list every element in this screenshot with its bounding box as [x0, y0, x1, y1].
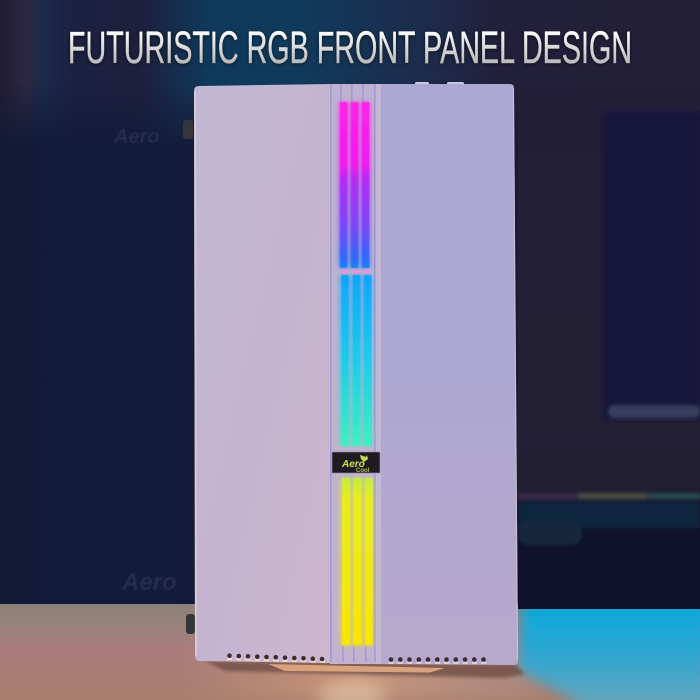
monitor on the desk [603, 112, 700, 420]
bottom vents: right [388, 657, 487, 663]
chair logo watermarks: Aero [121, 569, 177, 596]
Aerocool logo badge [332, 452, 380, 474]
RGB light bars: yellow [342, 478, 372, 645]
left face [194, 84, 332, 663]
desk with RGB keyboard [518, 493, 700, 609]
Aerocool logo badge: Aero [341, 459, 365, 470]
panel edge highlight [376, 84, 381, 664]
panel grooves [330, 84, 376, 662]
bar divider [341, 270, 370, 274]
bottom vents: left [227, 653, 325, 662]
RGB glow [338, 102, 374, 646]
top IO buttons [415, 82, 464, 86]
chair logo watermarks: Aero [113, 126, 160, 148]
centre panel [330, 84, 381, 664]
RGB light bars: blue to green [341, 275, 371, 446]
case foot [268, 664, 445, 672]
case shadow on table [205, 661, 525, 678]
right face [380, 84, 518, 665]
PC case front [194, 84, 518, 665]
Aerocool logo badge: Cool [356, 468, 370, 474]
background: table top [0, 600, 700, 700]
side thumb screws [183, 120, 195, 634]
case edge highlights [194, 88, 518, 660]
chair logo watermarks [113, 126, 177, 596]
RGB light bars: magenta to blue [340, 102, 369, 268]
